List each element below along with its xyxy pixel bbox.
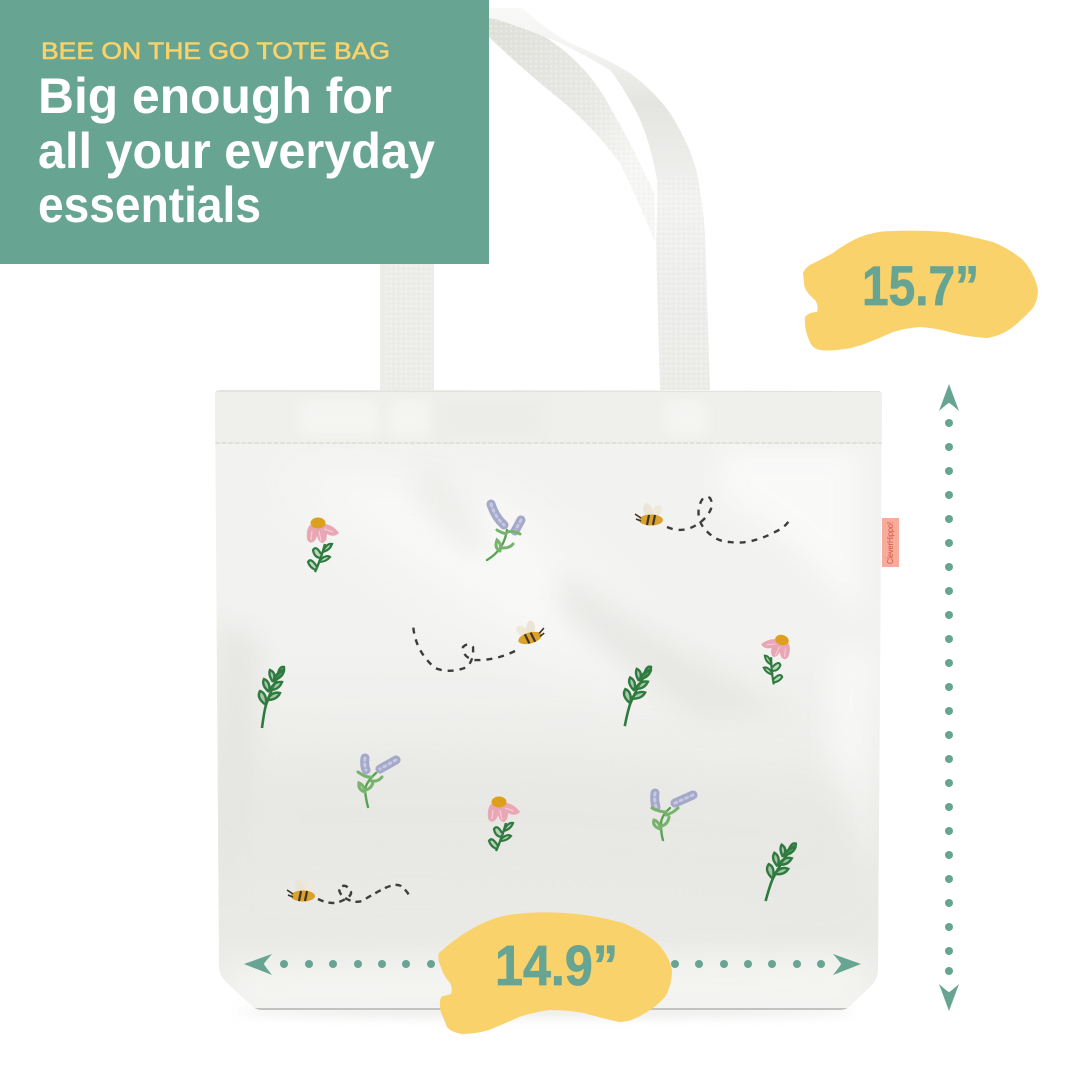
headline: all your everyday bbox=[38, 123, 435, 179]
sprig bottom right bbox=[762, 840, 796, 904]
header panel bbox=[0, 0, 489, 264]
sprig center bbox=[622, 665, 651, 728]
badge: width 14.9: 14.9” bbox=[495, 934, 618, 998]
arrowhead left bbox=[244, 954, 272, 975]
back handle strap bbox=[489, 18, 655, 242]
clever hippo side tag: CleverHippo! bbox=[886, 522, 895, 564]
lavender top bbox=[487, 504, 521, 560]
arrowhead top bbox=[939, 384, 959, 411]
flower bottom center bbox=[488, 796, 520, 851]
left handle strap bbox=[380, 262, 434, 390]
headline: Big enough for bbox=[38, 68, 392, 124]
flower top left bbox=[307, 518, 339, 572]
height dimension arrow bbox=[939, 384, 959, 1011]
eyebrow label: BEE ON THE GO TOTE BAG bbox=[41, 38, 390, 65]
clever hippo side tag bbox=[882, 518, 899, 567]
dotted line right bbox=[671, 960, 825, 968]
arrowhead right bbox=[833, 954, 861, 975]
headline bbox=[38, 68, 435, 233]
bee trail top right bbox=[635, 497, 790, 543]
top hem band bbox=[215, 392, 882, 443]
sprig left bbox=[259, 667, 284, 728]
lavender bottom center bbox=[652, 793, 693, 840]
bee trail bottom bbox=[287, 878, 409, 903]
arrowhead bottom bbox=[939, 984, 959, 1011]
dotted line vertical bbox=[945, 419, 953, 975]
right handle strap bbox=[489, 8, 710, 390]
drop shadow under bag bbox=[235, 1006, 855, 1018]
headline: essentials bbox=[38, 177, 261, 233]
badge: height 15.7 bbox=[803, 231, 1038, 350]
embroidery: flowers, lavender, sprigs, bees bbox=[259, 497, 796, 904]
width dimension arrow bbox=[244, 954, 861, 975]
tote bag bbox=[215, 8, 899, 1018]
bag body bbox=[215, 390, 882, 1010]
badge: height 15.7: 15.7” bbox=[862, 254, 979, 317]
dotted line left bbox=[280, 960, 435, 968]
bee trail center bbox=[413, 617, 547, 671]
fabric folds and shading bbox=[215, 391, 882, 1010]
flower right bbox=[752, 630, 793, 686]
badge: width 14.9 bbox=[438, 912, 672, 1034]
lavender bottom left bbox=[358, 758, 396, 807]
